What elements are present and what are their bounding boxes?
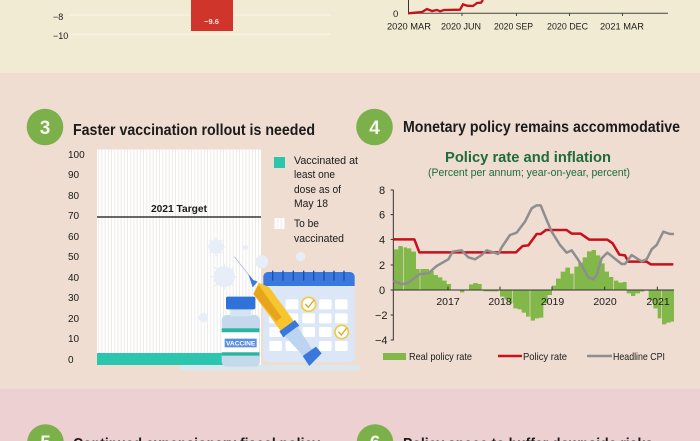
vial [222, 297, 260, 367]
legend: Policy rate [523, 351, 567, 363]
x axis year labels [436, 296, 670, 308]
x axis year labels: 2019 [541, 296, 564, 308]
bar chart: top left fragment: −9.6 [204, 17, 219, 26]
y axis labels: 40 [68, 273, 80, 284]
chart plot: to be vaccinated area [97, 150, 261, 365]
band: bottom section background [0, 389, 700, 441]
x axis year labels: 2021 [646, 296, 670, 308]
line chart: top right fragment: 2021 MAR [600, 22, 644, 32]
line: policy rate [393, 230, 673, 264]
virus particles [199, 237, 305, 322]
chart subtitle: (Percent per annum; year-on-year, percent) [428, 167, 630, 179]
y axis labels [375, 185, 388, 347]
line chart: top right fragment: 2020 DEC [547, 22, 588, 32]
band: top section background [0, 0, 700, 73]
y axis labels: −2 [375, 310, 388, 322]
y axis labels: 8 [379, 185, 385, 197]
line chart: top right fragment: 2020 JUN [441, 22, 481, 32]
y axis labels: 0 [68, 355, 74, 366]
legend: vaccinated and to be vaccinated: To be [294, 218, 319, 230]
y axis labels: 2 [379, 260, 385, 272]
ground strip [180, 365, 360, 370]
band: middle section background [0, 73, 700, 389]
y axis labels: 80 [68, 191, 80, 202]
x axis year labels: 2018 [488, 296, 512, 308]
line chart: top right fragment [387, 0, 668, 32]
number badge 4 [356, 109, 393, 145]
y axis labels: 60 [68, 232, 80, 243]
legend [383, 351, 665, 363]
y axis labels: 10 [68, 334, 80, 345]
number badge 5 [27, 424, 64, 441]
y axis labels: 20 [68, 314, 80, 325]
bar chart: top left fragment: −8 [53, 12, 63, 22]
bar chart: top left fragment: −10 [53, 31, 68, 41]
y axis labels: 4 [379, 234, 385, 246]
y axis labels: 30 [68, 293, 80, 304]
y axis labels: 90 [68, 170, 80, 181]
line: headline CPI [393, 205, 674, 284]
panel 3: vaccination chart [68, 150, 358, 366]
icon: vaccine vial, syringe and calendar [180, 237, 360, 370]
legend: vaccinated and to be vaccinated: least one [294, 169, 335, 181]
legend: vaccinated and to be vaccinated [274, 155, 358, 245]
legend: vaccinated and to be vaccinated: Vaccinated at [294, 155, 358, 167]
number badge 6 [357, 424, 393, 441]
bar: vaccinated [97, 353, 223, 365]
x axis year labels: 2020 [593, 296, 617, 308]
y axis labels: −4 [375, 335, 388, 347]
combo chart [391, 190, 674, 340]
legend: vaccinated and to be vaccinated: dose as of [294, 184, 342, 196]
y axis labels [68, 150, 85, 366]
legend: Headline CPI [613, 351, 665, 363]
bars: real policy rate [394, 246, 674, 324]
legend: vaccinated and to be vaccinated: May 18 [294, 198, 328, 210]
number badge 3: 3 [40, 118, 50, 139]
number badge 4: 4 [369, 118, 380, 139]
number badge 3 [27, 109, 63, 145]
syringe [234, 257, 322, 366]
chart title: Policy rate and inflation [445, 149, 611, 166]
line chart: top right fragment: 0 [393, 9, 398, 20]
panel 4: policy rate chart [375, 149, 674, 363]
y axis labels: 100 [68, 150, 85, 161]
axes [391, 190, 674, 340]
target line: 2021 Target [151, 203, 207, 215]
line chart: top right fragment: 2020 SEP [494, 22, 533, 32]
calendar [263, 271, 355, 362]
vial: VACCINE [226, 340, 255, 347]
line chart: top right fragment: 2020 MAR [387, 22, 431, 32]
legend: vaccinated and to be vaccinated: vaccinated [294, 233, 344, 245]
bar chart: top left fragment [53, 0, 331, 41]
y axis labels: 50 [68, 252, 80, 263]
heading: panel 3: Faster vaccination rollout is needed [73, 122, 315, 139]
y axis labels: 6 [379, 210, 385, 222]
x axis year labels: 2017 [436, 296, 460, 308]
y axis labels: 0 [379, 285, 385, 297]
legend: Real policy rate [409, 351, 472, 363]
y axis labels: 70 [68, 211, 80, 222]
